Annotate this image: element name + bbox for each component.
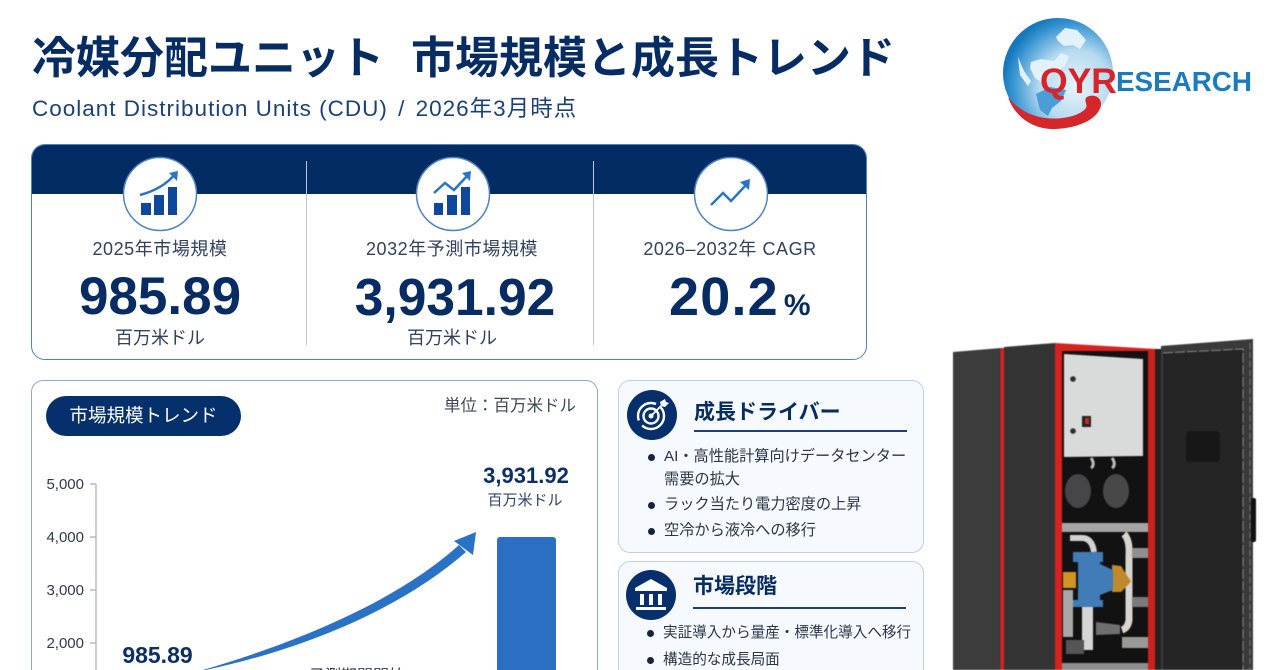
title: 冷媒分配ユニット	[32, 34, 384, 83]
stage list	[647, 624, 911, 668]
metric unit: 2032: 百万米ドル	[407, 328, 497, 348]
metric value: 2025: 985.89	[79, 267, 241, 326]
subtitle: Coolant Distribution Units (CDU) / 2026年3月時点	[32, 96, 577, 121]
shelf	[1062, 523, 1148, 532]
bullet 1: AI・高性能計算向けデータセンター	[664, 448, 906, 465]
y axis	[46, 476, 96, 670]
bar: 2032	[497, 537, 556, 670]
bullet 2: 構造的な成長局面	[663, 652, 780, 668]
drivers heading rule	[694, 430, 907, 432]
logo: QYResearch	[1003, 18, 1252, 129]
stage heading: 市場段階	[693, 575, 777, 598]
metric value: CAGR: 20.2%	[669, 267, 811, 327]
product image: CDU cabinet	[952, 338, 1257, 670]
stage card frame	[618, 561, 924, 670]
y axis: 5,000	[46, 476, 84, 493]
drivers heading: 成長ドライバー	[694, 401, 841, 424]
panel: key metrics	[31, 144, 867, 360]
value label: 2032	[483, 463, 569, 509]
icon: rising bars	[122, 156, 198, 232]
chart heading pill: 市場規模トレンド	[69, 405, 218, 426]
growth arrow	[196, 532, 476, 670]
unit note: 単位：百万米ドル	[444, 397, 576, 415]
icon: institution	[626, 570, 676, 620]
cabinet interior and red frame	[1055, 343, 1161, 670]
y axis: 4,000	[46, 529, 84, 546]
drivers list	[648, 448, 906, 539]
bullet 3: 空冷から液冷への移行	[664, 522, 816, 539]
icon: trend arrow	[694, 156, 768, 232]
logo: QYResearch: ESEARCH	[1116, 66, 1252, 97]
metric panel frame	[31, 144, 867, 360]
metric label: 2032: 2032年予測市場規模	[366, 239, 538, 259]
title	[32, 34, 895, 83]
fans	[1065, 458, 1129, 508]
title: 市場規模と成長トレンド	[411, 34, 895, 83]
chart panel frame	[31, 380, 598, 670]
metric unit: 2025: 百万米ドル	[115, 328, 205, 348]
metric label: 2025: 2025年市場規模	[92, 239, 228, 259]
icon: target	[627, 390, 677, 440]
bullet 1: 実証導入から量産・標準化導入へ移行	[663, 625, 911, 641]
control box	[1064, 354, 1143, 457]
cabinet side	[953, 343, 1055, 670]
logo: QYResearch: QYR	[1040, 61, 1117, 101]
divider 1	[306, 161, 307, 345]
y axis: 3,000	[46, 582, 84, 599]
icon: bars with trend line	[416, 156, 490, 232]
bar chart	[46, 463, 569, 670]
open door	[1161, 339, 1256, 670]
panel: growth drivers	[618, 380, 924, 553]
drivers card frame	[618, 380, 924, 553]
y axis: 2,000	[46, 635, 84, 652]
value label: 2032: 百万米ドル	[487, 492, 563, 509]
bullet 2: ラック当たり電力密度の上昇	[664, 496, 861, 513]
value label: 2032: 3,931.92	[483, 463, 569, 488]
pipework and valve	[1063, 534, 1148, 654]
divider 2	[593, 161, 594, 345]
bullet 1 continuation: 需要の拡大	[664, 471, 740, 488]
panel: market size trend chart	[31, 380, 598, 670]
stage heading rule	[693, 607, 906, 609]
metric label: CAGR: 2026–2032年 CAGR	[643, 239, 817, 259]
panel: market stage	[618, 561, 924, 670]
metric value: 2032: 3,931.92	[355, 268, 555, 326]
value label: 2025: 985.89	[122, 642, 193, 668]
chart heading pill	[46, 396, 241, 436]
